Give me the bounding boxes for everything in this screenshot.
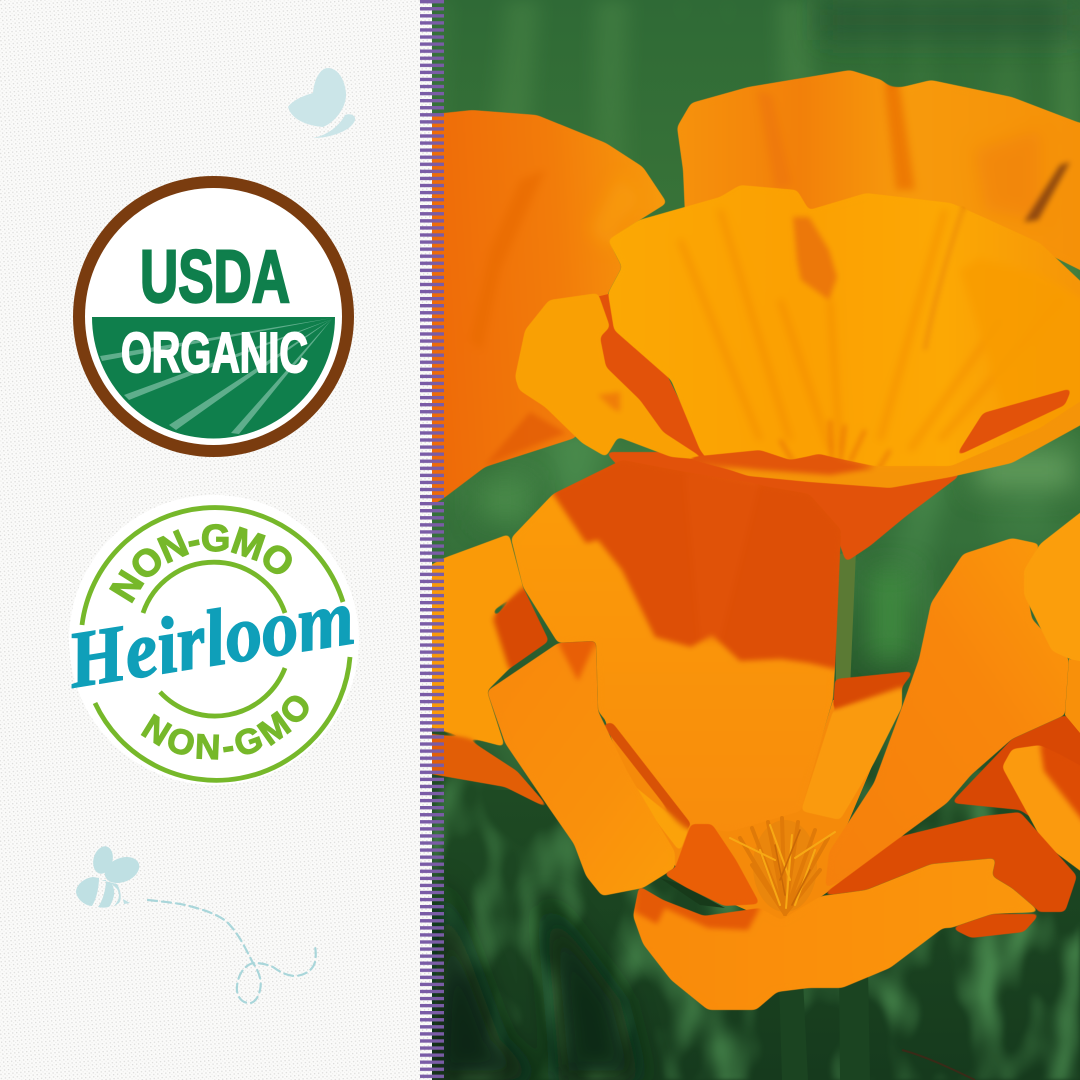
- outer ring arcs: [82, 508, 350, 780]
- middle flower: cup: [608, 185, 1080, 470]
- bee: [76, 844, 143, 908]
- lower flower: orange centre underlay: [604, 700, 873, 920]
- curved NON-GMO text: NON-GMO: [140, 696, 309, 760]
- cup base rays: [780, 420, 890, 470]
- lower flower: right scalloped petal: [1002, 745, 1080, 878]
- decorative purple stripe border: [420, 0, 444, 1080]
- lower flower: small centre petal: [663, 824, 760, 906]
- middle flower: rim and dark slit: [680, 388, 1080, 488]
- cup streaks: [681, 214, 989, 446]
- curved NON-GMO text: [109, 524, 309, 760]
- lower flower: front left petal: [487, 641, 675, 896]
- curved NON-GMO text: NON-GMO: [109, 524, 292, 604]
- lower flower: dark fold and centre-right petal: [602, 671, 914, 852]
- lower flower: dark gap: [660, 878, 725, 908]
- icon: bee with dashed flight path: [76, 844, 316, 1003]
- foliage background: [432, 0, 1080, 1080]
- shadow on petal: [553, 460, 841, 669]
- lower flower: far right petal: [1024, 505, 1080, 668]
- green field: [92, 317, 335, 438]
- lower flower: bottom petal: [633, 858, 1040, 1010]
- back flower, top right: [677, 70, 1080, 275]
- lower flower: stamens: [730, 818, 835, 914]
- photo: California poppies: [425, 0, 1080, 1080]
- middle flower: flap underlay: [598, 294, 702, 452]
- panel: linen background: [0, 0, 432, 1080]
- lower flower: bottom red band: [821, 812, 1077, 938]
- USDA wordmark: USDA: [140, 235, 290, 318]
- lower flower: main back petal: [511, 460, 841, 832]
- stems: [779, 970, 870, 1080]
- badge: USDA Organic seal: [73, 176, 354, 457]
- lower flower: shadowed back right: [954, 716, 1080, 816]
- badge: Non-GMO Heirloom stamp: [61, 495, 360, 785]
- inner fold: [793, 217, 837, 300]
- middle flower: underside cone: [605, 452, 962, 562]
- lower flower: right petal: [825, 538, 1069, 888]
- lower flower: left petal behind: [425, 534, 551, 810]
- stem above lower flower: [836, 550, 856, 690]
- middle flower: left flap: [515, 293, 706, 460]
- ORGANIC wordmark: ORGANIC: [121, 321, 308, 385]
- flight path: [148, 900, 316, 1003]
- bud tip stem: [902, 1050, 975, 1080]
- icon: butterfly: [288, 68, 355, 138]
- left flower: [425, 110, 667, 510]
- Heirloom script: Heirloom: [61, 573, 360, 705]
